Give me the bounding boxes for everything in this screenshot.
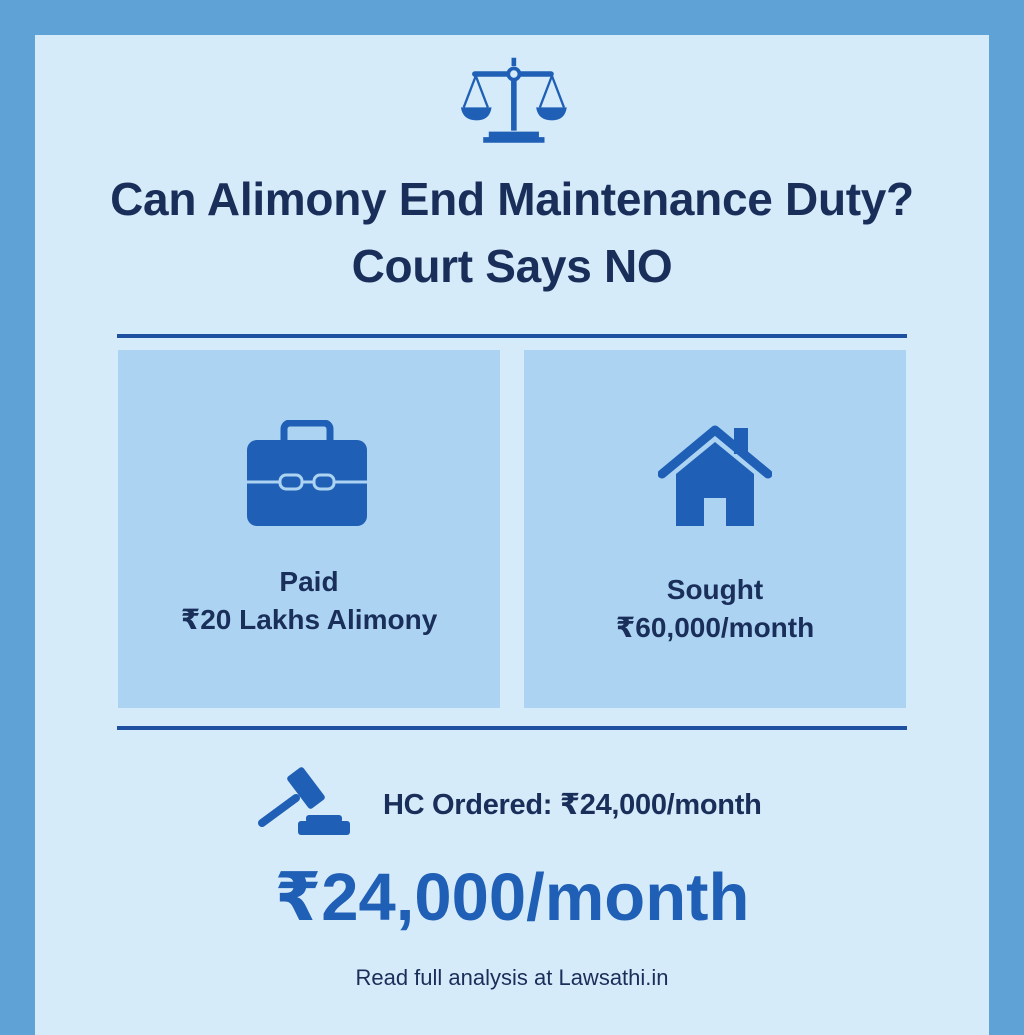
footer: Read full analysis at Lawsathi.in [355, 965, 669, 990]
text: HC ordered: HC Ordered: ₹24,000/month [383, 789, 762, 821]
icon: briefcase [247, 420, 367, 526]
title: Court Says NO [352, 240, 672, 292]
icon: gavel [258, 767, 350, 835]
text: paid: ₹20 Lakhs Alimony [181, 604, 437, 635]
text: sought [616, 574, 814, 643]
text: sought: ₹60,000/month [616, 612, 814, 643]
text: sought: Sought [667, 574, 763, 605]
icon: house [658, 426, 772, 526]
big number: ₹24,000/month [275, 860, 749, 935]
text: paid: Paid [279, 566, 339, 597]
title [110, 173, 914, 292]
panel: sought maintenance [524, 350, 906, 708]
title: Can Alimony End Maintenance Duty? [110, 173, 914, 225]
panel: paid alimony [118, 350, 500, 708]
text: paid [181, 566, 438, 635]
icon: scales of justice [461, 58, 567, 143]
